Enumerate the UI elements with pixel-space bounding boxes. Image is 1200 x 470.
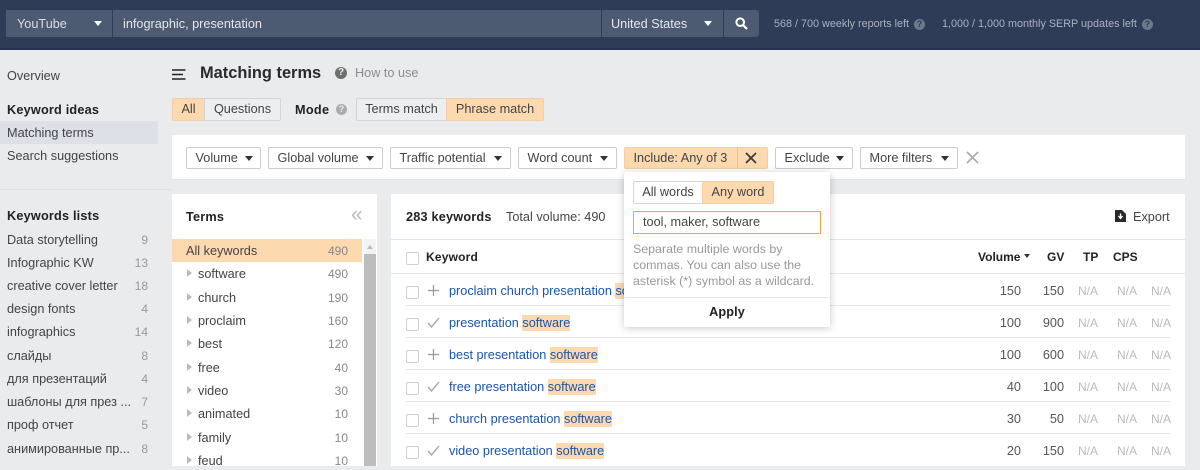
row: proclaim church presentation software: 150 <box>1043 284 1064 298</box>
sidebar keywords lists: creative cover letter <box>7 279 118 293</box>
row: presentation software: N/A <box>1078 316 1098 330</box>
toggle: all or questions: All <box>181 102 196 116</box>
row: church presentation software: N/A <box>1117 412 1137 426</box>
row: best presentation software: software <box>550 348 598 362</box>
panel: terms: All keywords <box>186 244 257 258</box>
page title row <box>172 64 418 82</box>
row: presentation software: 900 <box>1043 316 1064 330</box>
sidebar keywords lists: 4 <box>141 302 148 316</box>
row: proclaim church presentation software: 150 <box>1000 284 1021 298</box>
row: presentation software <box>406 306 1171 338</box>
sidebar keywords lists: Infographic KW <box>7 256 94 270</box>
panel: terms: 190 <box>328 291 348 305</box>
row: proclaim church presentation software: N/A <box>1078 284 1098 298</box>
toggle: match mode: Phrase match <box>456 102 534 116</box>
country selector <box>602 10 723 37</box>
row: church presentation software: 30 <box>1007 412 1021 426</box>
monthly SERP updates counter: ? <box>1145 19 1150 29</box>
label: mode <box>295 103 347 117</box>
table header: Volume <box>978 250 1020 264</box>
keyword search input <box>113 10 601 37</box>
row: best presentation software: 100 <box>1000 348 1021 362</box>
sidebar keywords lists: для презентаций <box>7 372 107 386</box>
total volume: Total volume: 490 <box>506 210 605 224</box>
table header: TP <box>1083 250 1098 264</box>
panel: filters <box>172 135 1185 180</box>
icon: help <box>335 67 347 79</box>
filter: volume: Volume <box>196 151 238 165</box>
table header: Keyword <box>426 250 478 264</box>
sidebar keywords lists: 14 <box>135 325 148 339</box>
filter: global volume <box>268 147 383 169</box>
toggle: match mode <box>356 98 544 121</box>
sidebar navigation: Search suggestions <box>7 149 118 163</box>
panel: terms: 10 <box>335 431 348 445</box>
heading: Matching terms: Matching terms <box>200 64 321 82</box>
toggle: all words or any word: All words <box>642 185 694 199</box>
panel: terms: 120 <box>328 337 348 351</box>
filter: traffic potential <box>390 147 511 169</box>
country selector: United States <box>611 17 687 31</box>
row: best presentation software: N/A <box>1151 348 1171 362</box>
row: presentation software: N/A <box>1117 316 1137 330</box>
top navigation bar <box>0 0 1200 50</box>
keyword count: 283 keywords <box>406 210 492 224</box>
panel: terms: animated <box>198 407 250 421</box>
search source selector: YouTube <box>17 17 67 31</box>
search button <box>724 10 759 37</box>
helper text <box>633 242 814 288</box>
sidebar navigation: Keyword ideas <box>7 103 99 117</box>
sidebar navigation <box>0 69 158 163</box>
icon: menu <box>172 69 186 80</box>
icon: help: ? <box>338 67 344 78</box>
filter: include active <box>624 147 768 169</box>
panel: keywords table <box>391 194 1185 466</box>
sidebar keywords lists: 18 <box>135 279 148 293</box>
row: best presentation software <box>406 338 1171 370</box>
toggle: all words or any word: Any word <box>712 185 764 199</box>
row: proclaim church presentation software: N/A <box>1117 284 1137 298</box>
panel: terms: family <box>198 431 231 445</box>
weekly reports counter: 568 / 700 weekly reports left <box>774 18 909 30</box>
filter: include active: Include: Any of 3 <box>634 151 727 165</box>
sidebar keywords lists: Data storytelling <box>7 233 98 247</box>
panel: terms: software <box>198 267 246 281</box>
row: presentation software: 100 <box>1000 316 1021 330</box>
sidebar keywords lists: 5 <box>141 418 148 432</box>
filter: word count <box>518 147 617 169</box>
panel: terms: video <box>198 384 228 398</box>
toggle: all words or any word <box>633 181 774 204</box>
label: mode: Mode <box>295 103 329 117</box>
sidebar keywords lists <box>7 209 148 456</box>
row: best presentation software: N/A <box>1078 348 1098 362</box>
helper text: commas. You can also use the <box>633 258 801 272</box>
row: church presentation software <box>406 402 1171 434</box>
filter: global volume: Global volume <box>278 151 359 165</box>
filter: exclude <box>775 147 853 169</box>
scrollbar <box>364 239 376 466</box>
sidebar navigation: Matching terms <box>7 126 94 140</box>
row: best presentation software: N/A <box>1117 348 1137 362</box>
row: free presentation software <box>406 370 1171 402</box>
row: church presentation software: N/A <box>1151 412 1171 426</box>
export button: Export <box>1133 210 1170 224</box>
row: presentation software: software <box>522 316 570 330</box>
row: video presentation software <box>406 443 1171 459</box>
icon: clear filters <box>966 152 978 164</box>
sidebar keywords lists: 7 <box>141 395 148 409</box>
row: presentation software: presentation <box>449 316 519 330</box>
filter: word count: Word count <box>528 151 592 165</box>
panel: terms: 490 <box>328 244 348 258</box>
sidebar keywords lists: проф отчет <box>7 418 74 432</box>
panel: terms <box>172 194 377 466</box>
row: free presentation software: N/A <box>1078 380 1098 394</box>
sidebar keywords lists: infographics <box>7 325 75 339</box>
row: free presentation software: 40 <box>1007 380 1021 394</box>
sidebar keywords lists: шаблоны для през ... <box>7 395 131 409</box>
row: free presentation software: N/A <box>1117 380 1137 394</box>
toggle: match mode: Terms match <box>365 102 438 116</box>
sidebar keywords lists: 9 <box>141 233 148 247</box>
apply button: Apply <box>709 305 745 319</box>
sidebar keywords lists: слайды <box>7 349 51 363</box>
weekly reports counter: ? <box>917 19 922 29</box>
row: church presentation software: 50 <box>1050 412 1064 426</box>
row: church presentation software: N/A <box>1078 412 1098 426</box>
label: mode: ? <box>339 104 344 114</box>
sidebar keywords lists: анимированные пр... <box>7 442 130 456</box>
sidebar keywords lists: Keywords lists <box>7 209 99 223</box>
table header: CPS <box>1113 250 1138 264</box>
row: free presentation software: free presentation <box>449 380 544 394</box>
panel: terms: 30 <box>335 384 348 398</box>
sidebar keywords lists: 4 <box>141 372 148 386</box>
row: free presentation software: N/A <box>1151 380 1171 394</box>
link: How to use: How to use <box>355 66 418 80</box>
search source selector <box>6 10 112 37</box>
row: video presentation software: 20 <box>1007 444 1021 458</box>
sidebar keywords lists: design fonts <box>7 302 75 316</box>
panel: terms: 490 <box>328 267 348 281</box>
row: video presentation software: N/A <box>1151 444 1171 458</box>
sidebar navigation: Overview <box>7 69 60 83</box>
row: best presentation software: best presentation <box>449 348 546 362</box>
row: proclaim church presentation software: proclaim church presentation <box>449 284 612 298</box>
icon: collapse: « <box>351 203 363 226</box>
sidebar keywords lists: 8 <box>141 349 148 363</box>
panel: terms: free <box>198 361 220 375</box>
panel: terms: church <box>198 291 236 305</box>
row: video presentation software: N/A <box>1117 444 1137 458</box>
sidebar keywords lists: 8 <box>141 442 148 456</box>
row: video presentation software: 150 <box>1043 444 1064 458</box>
export button <box>1115 210 1170 224</box>
input: include words: tool, maker, software <box>643 215 760 229</box>
heading: terms: Terms <box>186 210 224 224</box>
row: video presentation software: N/A <box>1078 444 1098 458</box>
panel: terms: best <box>198 337 222 351</box>
row: proclaim church presentation software <box>406 274 1171 306</box>
row: presentation software: N/A <box>1151 316 1171 330</box>
panel: terms: 40 <box>335 361 348 375</box>
panel: terms: feud <box>198 454 223 468</box>
row: proclaim church presentation software: N/A <box>1151 284 1171 298</box>
table header: GV <box>1047 250 1064 264</box>
row: video presentation software: video presentation <box>449 444 553 458</box>
toggle: all or questions: Questions <box>214 102 271 116</box>
filter: exclude: Exclude <box>784 151 830 165</box>
row: free presentation software: software <box>548 380 596 394</box>
panel: terms: 10 <box>335 407 348 421</box>
row: church presentation software: church presentation <box>449 412 560 426</box>
filter: traffic potential: Traffic potential <box>400 151 486 165</box>
row: church presentation software: software <box>564 412 612 426</box>
filter: more filters <box>860 147 958 169</box>
filter: volume <box>186 147 261 169</box>
row: best presentation software: 600 <box>1043 348 1064 362</box>
monthly SERP updates counter: 1,000 / 1,000 monthly SERP updates left <box>942 18 1137 30</box>
table header <box>391 240 1185 274</box>
filter: more filters: More filters <box>870 151 932 165</box>
helper text: Separate multiple words by <box>633 242 782 256</box>
row: free presentation software: 100 <box>1043 380 1064 394</box>
row: proclaim church presentation software: software <box>615 284 663 298</box>
sidebar keywords lists: 13 <box>135 256 148 270</box>
panel: terms: 10 <box>335 454 348 468</box>
input: include words <box>633 211 821 234</box>
panel: terms: proclaim <box>198 314 246 328</box>
popup: include filter <box>624 172 830 327</box>
toggle: all or questions <box>172 98 281 121</box>
panel: terms: 160 <box>328 314 348 328</box>
helper text: asterisk (*) symbol as a wildcard. <box>633 274 814 288</box>
keyword search input: infographic, presentation <box>123 17 262 31</box>
row: video presentation software: software <box>556 444 604 458</box>
